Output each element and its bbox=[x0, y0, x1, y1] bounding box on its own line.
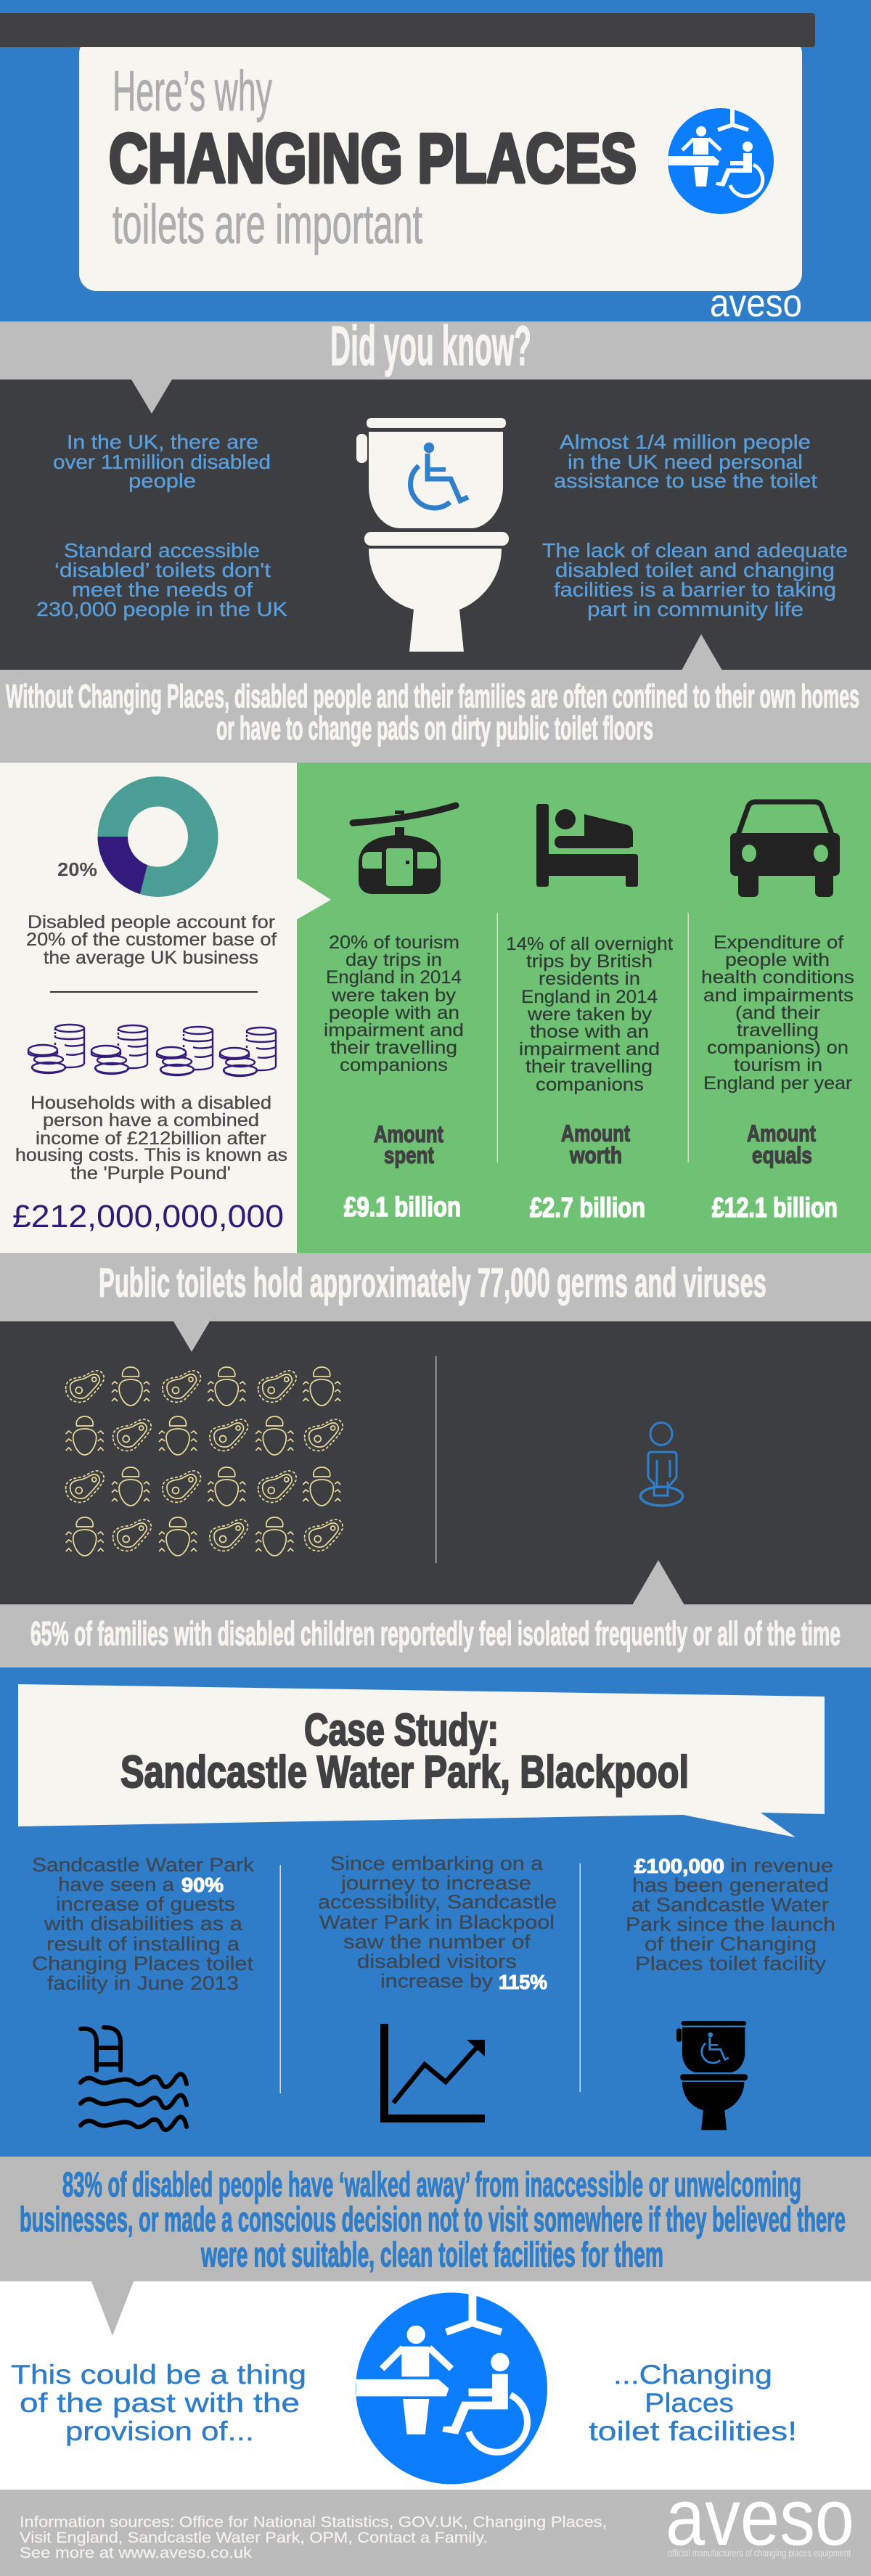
panel: call to action bbox=[0, 2281, 871, 2490]
text: 90 percent: have seen a bbox=[58, 1874, 175, 1895]
text: 11 million: over 11million disabled bbox=[53, 451, 271, 473]
text: sources: Visit England, Sandcastle Water Park, OPM, Contact a Family. bbox=[20, 2529, 488, 2546]
icon: toilet bbox=[356, 418, 509, 652]
text: 100,000 revenue bbox=[626, 1855, 835, 1974]
text: changing places facilities: Places bbox=[645, 2388, 734, 2418]
text: day trips: England in 2014 bbox=[326, 967, 462, 988]
text: quarter million: Almost 1/4 million people bbox=[560, 431, 811, 453]
text: 90 percent: increase of guests bbox=[56, 1893, 235, 1915]
text: thing of the past bbox=[11, 2360, 306, 2446]
text: barrier bbox=[542, 539, 848, 620]
panel: tourism bbox=[297, 763, 871, 1254]
text: 90 percent: facility in June 2013 bbox=[47, 1972, 239, 1994]
text: 115 percent: increase by bbox=[380, 1970, 494, 1992]
text: 90 percent bbox=[32, 1854, 255, 1994]
text: expenditure: companions) on bbox=[707, 1038, 848, 1058]
text: 115 percent: disabled visitors bbox=[357, 1951, 517, 1972]
text: overnight trips: England in 2014 bbox=[521, 987, 658, 1007]
text: expenditure: people with bbox=[725, 950, 830, 970]
text: day trips bbox=[324, 932, 464, 1075]
number: 2.7 billion: £2.7 billion bbox=[530, 1193, 645, 1223]
text: sources: Information sources: Office for National Statistics, GOV.UK, Changing Places, bbox=[20, 2514, 607, 2531]
text: changing places facilities: toilet facilities! bbox=[589, 2416, 797, 2446]
text: 100,000 revenue: of their Changing bbox=[645, 1933, 817, 1955]
text: 100,000 revenue: Places toilet facility bbox=[635, 1953, 827, 1974]
panel: isolation banner bbox=[0, 1604, 871, 1668]
panel: footer bbox=[0, 2473, 871, 2576]
text: day trips: their travelling bbox=[330, 1038, 457, 1058]
icon: black toilet bbox=[676, 2021, 748, 2130]
panel: confined banner bbox=[0, 634, 871, 763]
text: without changing places bbox=[6, 678, 859, 747]
text: 90 percent: Sandcastle Water Park bbox=[32, 1854, 255, 1876]
label: amount equals bbox=[747, 1120, 816, 1168]
text: day trips: companions bbox=[340, 1055, 448, 1075]
logo: aveso: aveso bbox=[710, 282, 802, 325]
text: barrier: part in community life bbox=[587, 598, 803, 620]
text: expenditure: (and their bbox=[735, 1003, 820, 1023]
text: customer base: 20% of the customer base of bbox=[26, 930, 277, 950]
text: thing of the past: of the past with the bbox=[20, 2388, 300, 2418]
text: overnight trips: their travelling bbox=[526, 1057, 653, 1077]
text: overnight trips: those with an bbox=[530, 1022, 649, 1042]
text: standard toilets: 230,000 people in the UK bbox=[36, 598, 287, 620]
text: 100,000 revenue: has been generated bbox=[632, 1874, 829, 1896]
text: 11 million: In the UK, there are bbox=[67, 431, 258, 453]
text: 115 percent: Water Park in Blackpool bbox=[319, 1911, 555, 1933]
text: 90 percent: with disabilities as a bbox=[44, 1913, 243, 1935]
text: customer base: Disabled people account for bbox=[28, 912, 275, 932]
heading: case study bbox=[120, 1705, 689, 1797]
text: standard toilets: Standard accessible bbox=[64, 539, 260, 562]
text: 115 percent bbox=[318, 1853, 557, 1993]
label: amount worth: worth bbox=[569, 1142, 622, 1168]
text: standard toilets: ‘disabled’ toilets don't bbox=[54, 559, 271, 581]
text: 100,000 revenue: £100,000 bbox=[634, 1855, 724, 1877]
donut chart: 20 percent bbox=[97, 792, 203, 894]
text: households: income of £212billion after bbox=[36, 1128, 266, 1149]
callout pointer bbox=[297, 878, 331, 919]
text: 100,000 revenue: Park since the launch bbox=[626, 1913, 835, 1935]
text: overnight trips bbox=[506, 934, 673, 1095]
text: expenditure: health conditions bbox=[701, 967, 854, 988]
text: sources: See more at www.aveso.co.uk bbox=[20, 2544, 252, 2561]
text: customer base bbox=[26, 912, 277, 968]
text: 100,000 revenue: in revenue bbox=[730, 1855, 833, 1876]
text: changing places facilities: ...Changing bbox=[613, 2360, 772, 2390]
number: 9.1 billion: £9.1 billion bbox=[344, 1192, 461, 1223]
number: 12.1 billion: £12.1 billion bbox=[712, 1193, 838, 1223]
panel: did you know banner bbox=[0, 315, 871, 380]
text: thing of the past: provision of... bbox=[65, 2416, 254, 2446]
text: 115 percent: 115% bbox=[499, 1971, 547, 1993]
text: 100,000 revenue: at Sandcastle Water bbox=[631, 1894, 829, 1916]
title bar bbox=[0, 13, 815, 47]
text: overnight trips: residents in bbox=[539, 969, 640, 989]
text: overnight trips: companions bbox=[536, 1075, 644, 1095]
panel: case study bbox=[0, 1668, 871, 2157]
icon: bed bbox=[536, 804, 638, 887]
text: 83 percent bbox=[20, 2166, 846, 2274]
label: amount worth: Amount bbox=[561, 1120, 630, 1147]
text: day trips: were taken by bbox=[331, 985, 457, 1006]
label: 20%: 20% bbox=[57, 858, 97, 880]
text: quarter million bbox=[554, 431, 817, 492]
text: day trips: 20% of tourism bbox=[329, 932, 459, 953]
text: expenditure: and impairments bbox=[703, 985, 854, 1006]
icon: coins bbox=[28, 1025, 276, 1076]
speech bubble bbox=[18, 1684, 825, 1837]
icon: changing places symbol bbox=[668, 108, 774, 214]
text: day trips: impairment and bbox=[324, 1020, 464, 1041]
number: 212 billion: £212,000,000,000 bbox=[12, 1199, 284, 1234]
label: amount worth bbox=[561, 1120, 630, 1168]
text: quarter million: in the UK need personal bbox=[568, 451, 803, 473]
text: barrier: facilities is a barrier to taking bbox=[554, 578, 836, 601]
icon: cable car bbox=[353, 805, 456, 894]
text: 115 percent: Since embarking on a bbox=[330, 1853, 544, 1874]
text: 90 percent: Changing Places toilet bbox=[32, 1953, 254, 1974]
icon: isolated person bbox=[640, 1422, 682, 1506]
icon grid: germs bbox=[66, 1367, 343, 1556]
text: 90 percent: 90% bbox=[181, 1874, 224, 1896]
text: 90 percent: result of installing a bbox=[46, 1933, 240, 1955]
icon: car bbox=[730, 802, 840, 897]
text: thing of the past: This could be a thing bbox=[11, 2360, 306, 2390]
card: title card bbox=[79, 36, 802, 291]
panel: did you know facts bbox=[0, 380, 871, 670]
text: customer base: the average UK business bbox=[44, 948, 258, 968]
heading: case study: Sandcastle Water Park, Blackpool bbox=[120, 1747, 689, 1797]
label: amount spent: Amount bbox=[374, 1121, 443, 1147]
text: expenditure bbox=[701, 932, 854, 1094]
text: expenditure: travelling bbox=[737, 1020, 819, 1041]
panel: germs and isolation bbox=[0, 1321, 871, 1605]
label: amount spent bbox=[374, 1121, 443, 1168]
text: overnight trips: were taken by bbox=[527, 1004, 653, 1025]
panel: header bbox=[0, 0, 871, 325]
text: 115 percent: accessibility, Sandcastle bbox=[318, 1891, 557, 1913]
text: day trips: people with an bbox=[329, 1003, 459, 1023]
text: 115 percent: saw the number of bbox=[343, 1931, 531, 1953]
text: expenditure: England per year bbox=[703, 1073, 852, 1094]
text: overnight trips: impairment and bbox=[519, 1039, 660, 1059]
text: barrier: disabled toilet and changing bbox=[555, 559, 835, 581]
title: toilets are important: toilets are important bbox=[113, 194, 422, 255]
text: quarter million: assistance to use the toilet bbox=[554, 469, 817, 492]
label: amount spent: spent bbox=[384, 1142, 434, 1168]
panel: germs banner bbox=[0, 1253, 871, 1321]
text: day trips: day trips in bbox=[345, 950, 442, 970]
label: amount equals: equals bbox=[752, 1142, 812, 1168]
icon: rising chart bbox=[380, 2024, 485, 2122]
heading: did you know: Did you know? bbox=[330, 315, 531, 377]
callout pointer bbox=[131, 380, 172, 414]
text: expenditure: Expenditure of bbox=[713, 932, 843, 953]
text: standard toilets bbox=[36, 539, 287, 620]
icon: changing places symbol large bbox=[356, 2293, 547, 2484]
text: 11 million bbox=[53, 431, 271, 492]
text: expenditure: tourism in bbox=[734, 1055, 822, 1075]
text: households bbox=[15, 1093, 287, 1184]
text: households: person have a combined bbox=[43, 1110, 259, 1131]
callout pointer bbox=[173, 1321, 210, 1352]
text: households: housing costs. This is known as bbox=[15, 1145, 287, 1165]
callout pointer bbox=[91, 2281, 134, 2336]
text: overnight trips: trips by British bbox=[526, 951, 653, 972]
panel: walked away banner bbox=[0, 2157, 871, 2282]
label: amount equals: Amount bbox=[747, 1120, 816, 1147]
callout pointer bbox=[682, 634, 722, 670]
title: changing places: CHANGING PLACES bbox=[109, 120, 637, 197]
text: sources bbox=[20, 2514, 607, 2561]
icon: swimming pool bbox=[81, 2027, 187, 2130]
text: standard toilets: meet the needs of bbox=[72, 578, 253, 601]
text: households: the 'Purple Pound' bbox=[70, 1163, 231, 1184]
text: households: Households with a disabled bbox=[30, 1093, 271, 1113]
heading: case study: Case Study: bbox=[304, 1705, 499, 1755]
text: changing places facilities bbox=[589, 2360, 797, 2446]
text: barrier: The lack of clean and adequate bbox=[542, 539, 848, 562]
callout pointer bbox=[632, 1560, 684, 1605]
title: here's why: Here’s why bbox=[113, 59, 272, 123]
text: 11 million: people bbox=[128, 469, 196, 492]
text: 115 percent: journey to increase bbox=[340, 1872, 531, 1894]
panel: purple pound bbox=[0, 763, 298, 1254]
text: overnight trips: 14% of all overnight bbox=[506, 934, 673, 954]
